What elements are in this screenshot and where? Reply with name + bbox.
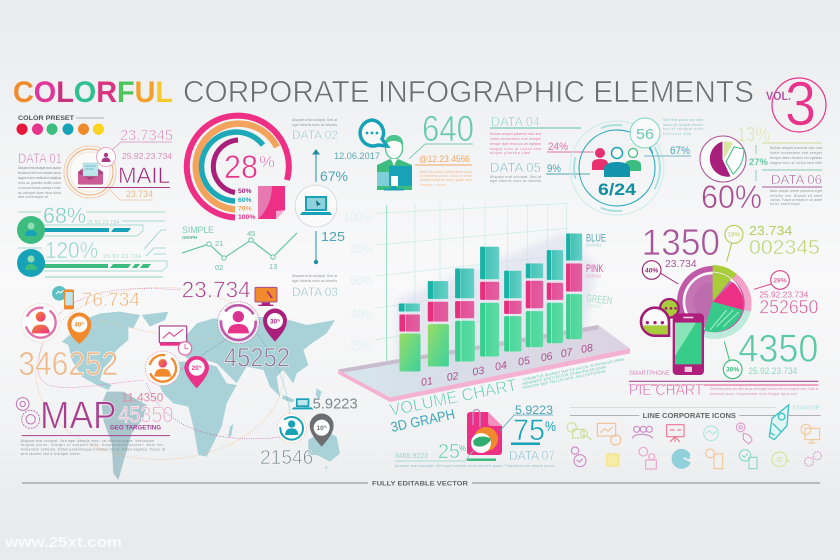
operator with chat bubble: tempor nunc bbox=[420, 183, 446, 187]
data 04 and data 05: lorem consectetur erat semper bbox=[490, 137, 542, 141]
y axis labels: 60% bbox=[351, 272, 373, 288]
pie chart section: 25.92.23.734 bbox=[759, 289, 809, 299]
icon: green user circle bbox=[17, 216, 45, 244]
marker: asia: % bbox=[277, 318, 280, 322]
chart grid bbox=[375, 203, 567, 363]
pie chart section: 23.734 bbox=[665, 259, 697, 270]
map title: GEO TARGETING bbox=[110, 424, 161, 431]
pie: 60 percent, data 06: 27% bbox=[749, 157, 768, 167]
y axis labels: 80% bbox=[351, 240, 373, 256]
category labels: 08 bbox=[580, 342, 594, 356]
volume chart title: HENDRERIT EGET LECTUS. ETIAM DOLOR QUAM bbox=[522, 365, 606, 386]
data 02 and 03 column: eget lobortis nunc ac lobortis bbox=[292, 123, 337, 127]
pie chart section: 23.734 bbox=[749, 223, 793, 238]
category labels: 02 bbox=[446, 370, 460, 384]
operator with chat bubble: aliquet tempus dolor quam sem bbox=[420, 178, 472, 182]
pie: 60 percent, data 06: DATA 06 bbox=[771, 172, 822, 187]
pie chart labels: Sed felis purus nec nibh lacus sit feugiat mauris sed at volutpat nunc. Duis at bbox=[710, 387, 818, 391]
pie bbox=[677, 265, 752, 339]
data 04 and data 05: 9% bbox=[547, 163, 561, 175]
mail widget: MAIL bbox=[118, 163, 170, 188]
series legend: GREEN bbox=[586, 293, 613, 307]
data 02 and 03 column: Aliquam erat volutpat. Sed at bbox=[292, 118, 337, 122]
concentric donut chart: 50% bbox=[238, 188, 252, 195]
y axis labels bbox=[343, 209, 373, 353]
category labels: 04 bbox=[494, 359, 508, 373]
category labels: 01 bbox=[420, 375, 434, 389]
title: CORPORATE INFOGRAPHIC ELEMENTS bbox=[183, 74, 754, 109]
pie: 60 percent, data 06: 60% bbox=[701, 179, 762, 215]
map title bbox=[21, 393, 170, 456]
pie chart section: 252650 bbox=[759, 297, 818, 318]
concentric donut chart: 100% bbox=[238, 214, 255, 221]
concentric donut chart: % bbox=[259, 154, 275, 171]
data 04 and data 05 bbox=[490, 115, 594, 183]
concentric donut chart: 70% bbox=[238, 206, 252, 212]
pie chart labels: PIE CHART bbox=[629, 382, 704, 399]
category labels: 05 bbox=[517, 355, 531, 369]
pie chart section: 19% bbox=[727, 232, 741, 239]
3D graph subtitle: 3D GRAPH bbox=[389, 406, 456, 435]
category labels: 03 bbox=[471, 365, 485, 379]
icon: sticky note bbox=[258, 186, 285, 219]
progress row: 120 percent: 120% bbox=[45, 237, 98, 263]
chart floor bbox=[338, 325, 630, 402]
icon: file with paperclip bbox=[467, 410, 502, 455]
pie chart section: 25.92.23.734 bbox=[748, 366, 797, 376]
series legend: DATA02 bbox=[586, 273, 602, 278]
pie: 60 percent, data 06: varius. Fusce pretium in sit amet bbox=[770, 198, 822, 202]
team circle: lacus sit feugiat mauris bbox=[663, 123, 703, 127]
pie chart section: 30% bbox=[726, 367, 739, 374]
mail widget: 23.734 bbox=[126, 189, 153, 200]
team circle: Sed felis purus nec nibh bbox=[663, 118, 703, 122]
pie: 60 percent, data 06: magna nunc at luctus sem nibh bbox=[770, 161, 822, 165]
map title: fermentum vehicula. Etiam pellentesque tincidunt tellus. Etiam dapibus. Fusce at bbox=[21, 448, 165, 452]
data 02 and 03 column: 67% bbox=[320, 168, 348, 184]
icon: user badge bbox=[96, 148, 116, 166]
data 04 and data 05: Nullam aliquet placerat odio sed bbox=[490, 132, 541, 136]
world map section bbox=[16, 276, 358, 480]
marker: asia bbox=[217, 302, 287, 344]
operator with chat bubble: at eleifend purus. Nunc a lorem bbox=[420, 174, 472, 178]
data 01 label and text: augue fusce vestibulum dapibus bbox=[18, 176, 61, 180]
map title: MAP bbox=[40, 393, 117, 437]
simple line graph: 02 bbox=[215, 263, 223, 272]
icon: teal user circle bbox=[17, 249, 45, 277]
marker: africa: 20 bbox=[192, 365, 199, 372]
icon: rocket bbox=[769, 405, 789, 440]
data 01 label and text: sem scelerisque sit bbox=[18, 195, 48, 199]
team circle bbox=[570, 118, 703, 215]
icon: chat bubble bbox=[360, 120, 387, 146]
world map section: 45252 bbox=[224, 343, 290, 373]
marker: africa bbox=[145, 351, 209, 388]
marker: north america: 40 bbox=[74, 322, 81, 329]
simple line graph: 21 bbox=[215, 239, 223, 248]
footer divider: FULLY EDITABLE VECTOR bbox=[372, 480, 468, 488]
concentric donut chart: 60% bbox=[238, 197, 252, 204]
volume chart title: GRAVIDA SED TELLUS NON, PELLENTESQUE bbox=[522, 369, 607, 390]
title: COLORFUL bbox=[13, 76, 173, 109]
data 02 and 03 column: DATA 02 bbox=[292, 128, 338, 142]
data 01 label and text: tincidunt nibh non mauris lacus bbox=[18, 171, 61, 175]
data 04 and data 05: tempor diam rhoncus vel egestas bbox=[490, 142, 541, 146]
world map bbox=[62, 312, 340, 480]
icon row 2 bbox=[571, 447, 821, 469]
pie: 60 percent, data 06: tempor diam rhoncus vel egestas bbox=[770, 156, 822, 160]
data 02 and 03 column: Aliquam erat volutpat. Sed at bbox=[292, 274, 337, 278]
operator with chat bubble: Nulla tincidunt consectetur risus bbox=[420, 170, 472, 174]
progress row: 120 percent bbox=[17, 230, 167, 277]
category labels: 07 bbox=[560, 346, 575, 360]
data 04 and data 05: 24% bbox=[548, 141, 568, 153]
world map section: 5.9223 bbox=[313, 395, 358, 412]
data 07 block: % bbox=[545, 418, 556, 434]
world map section: 21546 bbox=[260, 446, 313, 469]
marker: asia: 30 bbox=[270, 318, 277, 325]
simple line graph: GRAPH bbox=[182, 235, 197, 240]
icon: chat bubbles bbox=[641, 299, 679, 336]
series legend: PINK bbox=[586, 263, 603, 275]
pie chart section: 002345 bbox=[749, 237, 820, 259]
data 02 and 03 column: eget lobortis nunc ac lobortis bbox=[292, 279, 337, 283]
pie chart labels: SMARTPHONE bbox=[629, 371, 670, 377]
progress row: 68 percent bbox=[17, 203, 165, 244]
dotted routes bbox=[36, 287, 290, 459]
mail widget: 23.7345 bbox=[120, 127, 173, 144]
simple line graph: 13 bbox=[269, 262, 277, 271]
3D volume chart bbox=[338, 203, 630, 420]
chart shadow bbox=[397, 233, 597, 367]
world map section: 346252 bbox=[18, 346, 118, 383]
concentric donut chart bbox=[187, 116, 289, 221]
map title: sem laoreet nisl a tristique lorem. bbox=[21, 452, 81, 456]
icon: chart screen and clock bbox=[159, 326, 192, 355]
icon: team of people bbox=[592, 148, 641, 177]
volume chart title: CURABITUR BLANDIT MATTIS LACUS, IN SODALES URNA bbox=[522, 357, 625, 382]
color preset bbox=[16, 115, 104, 135]
section heading: LINE CORPORATE ICONS bbox=[643, 411, 736, 420]
pie: 60 percent, data 06: efficitur nisi. Blandit sit amet bbox=[770, 194, 822, 198]
data 01 label and text: nunc ac gravida mollis tortor bbox=[18, 181, 62, 185]
y axis labels: 40% bbox=[351, 305, 373, 321]
arrow up bbox=[313, 150, 319, 182]
map numbers: 76.734 bbox=[82, 290, 140, 311]
series legend: DATA01 bbox=[586, 243, 602, 248]
pie chart labels: tincidunt lacus. Suspendisse dolor feugiat ligula sed bbox=[710, 392, 797, 396]
percent callouts bbox=[642, 225, 789, 379]
marker: north america: % bbox=[81, 322, 84, 326]
data 01 label and text: ac volutpat diam risus dolor bbox=[18, 191, 62, 195]
icon: phone and cloud bbox=[52, 286, 74, 309]
simple line graph: 45 bbox=[247, 229, 255, 238]
series legend: DATA03 bbox=[586, 303, 602, 309]
volume chart title: VOLUME CHART bbox=[388, 374, 519, 420]
data 04 and data 05: DATA 04 bbox=[491, 115, 540, 129]
pie chart section: 4350 bbox=[738, 328, 818, 371]
bars bbox=[399, 233, 582, 372]
data 01 label and text: Aliquam erat volutpat nunc auctor bbox=[18, 166, 62, 170]
map title: feugiat purus. Integer ut sodales felis. Suspendisse potenti. Nam nec bbox=[21, 443, 164, 447]
volume badge: 3 bbox=[785, 70, 816, 139]
data 02 and 03 column: 125 bbox=[321, 229, 345, 244]
y axis labels: 100% bbox=[343, 209, 373, 225]
world map section: 45350 bbox=[118, 402, 173, 428]
icon: laptop bbox=[295, 185, 337, 227]
data 07 block: Aliquam erat volutpat. Sed eget lobortis nunc lobortis quam. Phasellus non neque purus bbox=[395, 464, 554, 468]
y axis labels: 20% bbox=[351, 337, 373, 353]
team circle: 56 bbox=[636, 126, 654, 143]
volume chart title bbox=[388, 357, 625, 420]
marker: australia: 10 bbox=[317, 425, 324, 432]
category labels: 06 bbox=[540, 350, 554, 364]
section heading bbox=[570, 406, 821, 420]
data 04 and data 05: magna nunc at luctus sem bbox=[490, 147, 541, 151]
pie chart section: 29% bbox=[773, 277, 787, 284]
pie: 60 percent, data 06: tortor scelerisque bbox=[770, 202, 800, 206]
series legend: BLUE bbox=[586, 232, 606, 244]
pie chart section bbox=[629, 221, 820, 399]
section heading: STARTUP bbox=[793, 406, 820, 412]
pie: 60 percent, data 06: Nullam aliquet placerat odio sed bbox=[770, 146, 822, 150]
icon: smartphone bbox=[673, 313, 704, 375]
pie: 60 percent, data 06 bbox=[700, 124, 823, 215]
team circle: tincidunt sem bbox=[663, 132, 691, 136]
pie: 60 percent, data 06: lorem consectetur erat semper bbox=[770, 151, 823, 155]
data 07 block: 25 bbox=[438, 441, 460, 463]
data 07 block: % bbox=[459, 444, 466, 453]
mail widget bbox=[64, 127, 173, 200]
color preset: COLOR PRESET bbox=[18, 115, 74, 122]
data 07 block bbox=[395, 403, 556, 468]
series legend bbox=[586, 232, 613, 309]
marker: africa: % bbox=[199, 365, 202, 369]
data 07 block: 75 bbox=[513, 414, 545, 447]
data 01 label and text: DATA 01 bbox=[18, 151, 62, 166]
data 04 and data 05: DATA 05 bbox=[490, 160, 541, 175]
map title: Aliquam erat volutpat. Sed eget lobortis nunc, vel lobortis augue. Vestibulum bbox=[21, 439, 154, 443]
progress row: 120 percent: 25.92.23.734 bbox=[103, 254, 141, 260]
operator with chat bubble: 640 bbox=[422, 108, 474, 149]
big numbers: 1350 bbox=[642, 221, 720, 263]
world map section: 11.4350 bbox=[122, 391, 164, 405]
team circle: 6/24 bbox=[598, 180, 637, 199]
team circle: 67% bbox=[670, 145, 690, 157]
marker: australia: % bbox=[324, 425, 327, 429]
data 02 and 03 column: DATA 03 bbox=[292, 285, 338, 299]
icon: gears bbox=[16, 398, 40, 428]
world map section: 23.734 bbox=[182, 276, 251, 302]
marker: north america bbox=[21, 303, 91, 344]
icon row 1 bbox=[567, 423, 820, 445]
icon: laptop small bbox=[292, 398, 313, 409]
progress row: 68 percent: 25.92.23.734 bbox=[87, 220, 119, 226]
data 04 and data 05: eget lobortis nunc ac lobortis bbox=[490, 179, 541, 183]
simple line graph: SIMPLE bbox=[182, 225, 214, 235]
volume badge bbox=[766, 70, 826, 139]
category labels bbox=[420, 342, 594, 389]
icon: monitor bbox=[255, 287, 277, 306]
pie: 60 percent, data 06: 13% bbox=[737, 124, 770, 146]
volume badge: VOL. bbox=[766, 89, 791, 103]
mail widget: 25.92.23.734 bbox=[122, 151, 172, 161]
pie: 60 percent, data 06: Nam neque lorem pharetra eget bbox=[770, 189, 822, 193]
data 07 block: 3455.9223 bbox=[395, 453, 428, 460]
data 04 and data 05: aliquet pharetra diam bbox=[490, 151, 530, 155]
simple line graph bbox=[182, 225, 297, 272]
icon: envelope bbox=[78, 163, 103, 184]
data 07 block: DATA 07 bbox=[509, 448, 555, 463]
operator with chat bubble: @12.23.4566 bbox=[419, 154, 470, 165]
pie chart section: 40% bbox=[645, 267, 658, 274]
data 04 and data 05: Aliquam erat volutpat. Sed at bbox=[490, 175, 541, 179]
marker: australia bbox=[277, 414, 334, 447]
progress row: 68 percent: 68% bbox=[43, 203, 86, 228]
icon: person at desk bbox=[377, 135, 412, 190]
data 01 label and text: ut cursus lectus semper enim bbox=[18, 186, 61, 190]
data 07 block: 5.9223 bbox=[515, 403, 553, 417]
operator with chat bubble: 12.06.2017 bbox=[334, 151, 380, 162]
team circle: sed at volutpat nunc bbox=[663, 127, 703, 131]
data 02 and 03 column bbox=[292, 118, 348, 299]
operator with chat bubble bbox=[334, 108, 474, 190]
watermark: www.25xt.com bbox=[4, 534, 122, 551]
data 01 label and text bbox=[18, 151, 62, 199]
line corporate icons section bbox=[567, 405, 821, 469]
concentric donut chart: 28 bbox=[224, 149, 258, 185]
pie chart labels bbox=[629, 371, 818, 399]
